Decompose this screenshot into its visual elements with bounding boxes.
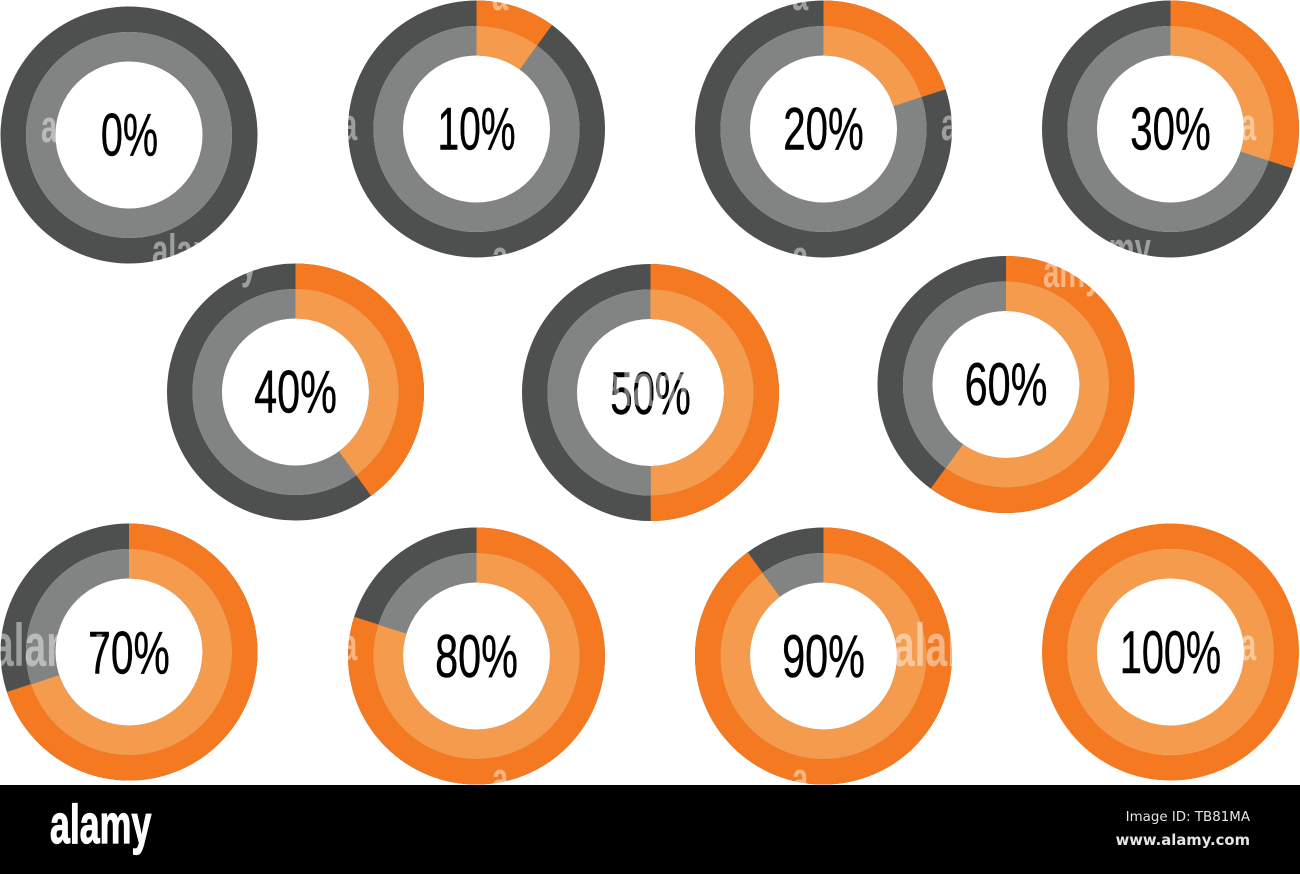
watermark overlay: a [1240, 621, 1257, 671]
label: 0%: 0% [101, 101, 158, 168]
watermark overlay: a [492, 233, 509, 283]
watermark overlay: a [341, 101, 358, 151]
donut chart: 10% [361, 13, 592, 245]
watermark overlay: alamy [1068, 225, 1151, 275]
label: 80%: 80% [435, 622, 518, 690]
watermark overlay: a [492, 755, 509, 805]
label: 10%: 10% [437, 95, 516, 163]
watermark overlay: a [1240, 101, 1257, 151]
label: 60%: 60% [965, 350, 1047, 418]
watermark overlay: a [341, 621, 358, 671]
image id: Image ID: TB81MA [1126, 810, 1251, 825]
donut chart: 100% [1055, 536, 1286, 768]
footer bar [0, 785, 1300, 874]
watermark overlay: a [792, 755, 809, 805]
watermark overlay: alamy [152, 227, 235, 277]
donut chart: 50% [535, 277, 766, 508]
donut chart: 0% [13, 19, 245, 251]
donut chart: 20% [708, 13, 939, 245]
label: 70%: 70% [88, 620, 170, 686]
label: 40%: 40% [254, 358, 337, 425]
donut chart: 30% [1055, 13, 1286, 245]
watermark overlay: y [241, 239, 257, 289]
watermark overlay: a [941, 101, 958, 151]
footer logo: alamy: alamy [50, 793, 152, 855]
label: 100%: 100% [1120, 619, 1221, 686]
label: 20%: 20% [783, 95, 864, 162]
donut chart: 60% [890, 269, 1122, 500]
label: 30%: 30% [1130, 95, 1211, 162]
website: www.alamy.com [1116, 832, 1250, 849]
watermark overlay: alamy [893, 611, 1004, 679]
donut chart: 70% [13, 536, 245, 768]
label: 50%: 50% [610, 360, 691, 427]
watermark overlay: a [41, 103, 58, 153]
donut chart: 80% [361, 540, 592, 772]
watermark overlay: amy [1043, 248, 1102, 298]
watermark overlay: a [792, 233, 809, 283]
donut chart: 90% [708, 540, 939, 772]
label: 90%: 90% [782, 622, 865, 690]
donut chart: 40% [180, 276, 411, 508]
watermark overlay: alamy [600, 351, 711, 419]
